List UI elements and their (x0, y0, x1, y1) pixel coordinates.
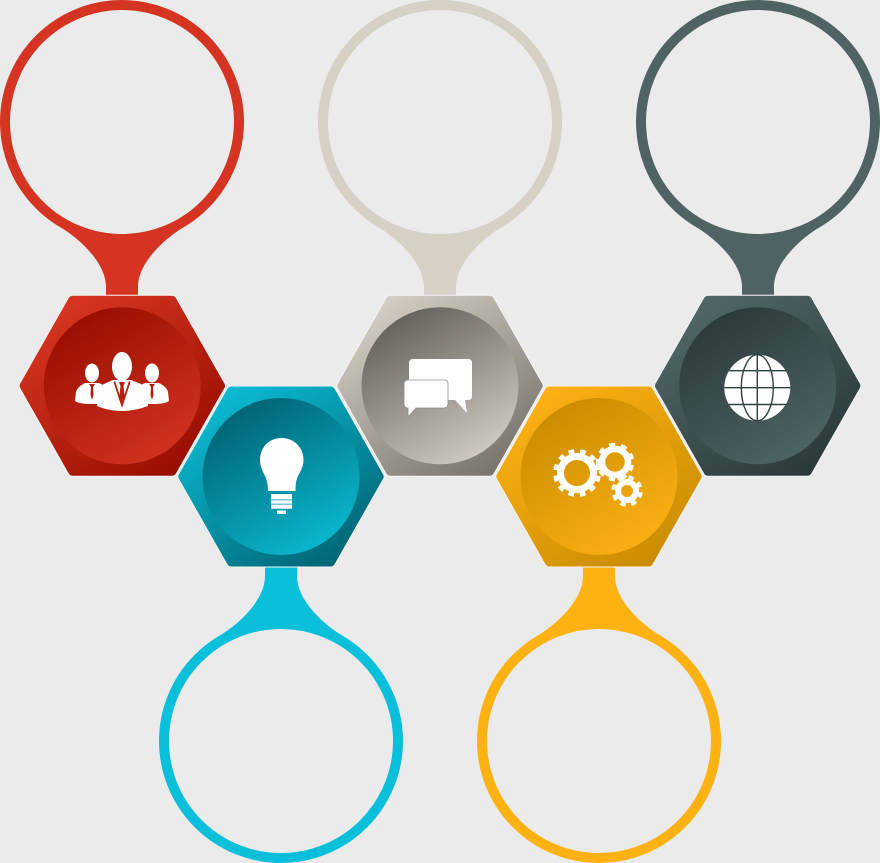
icon: globe (724, 355, 790, 421)
ring and connector: slate (641, 5, 875, 297)
icon: business people (75, 352, 169, 411)
hexagon: yellow (496, 386, 702, 567)
ring and connector: beige (323, 5, 557, 297)
ring and connector: red (5, 5, 239, 297)
hexagon: slate (654, 295, 861, 476)
hexagon: teal (178, 386, 384, 567)
hexagon: red (19, 295, 226, 476)
icon: gears (549, 442, 642, 506)
hexagon: beige (337, 295, 543, 476)
icon: light bulb (260, 438, 304, 514)
icon: speech bubbles (404, 359, 472, 417)
ring and connector: yellow (482, 566, 716, 858)
ring and connector: teal (164, 566, 398, 858)
